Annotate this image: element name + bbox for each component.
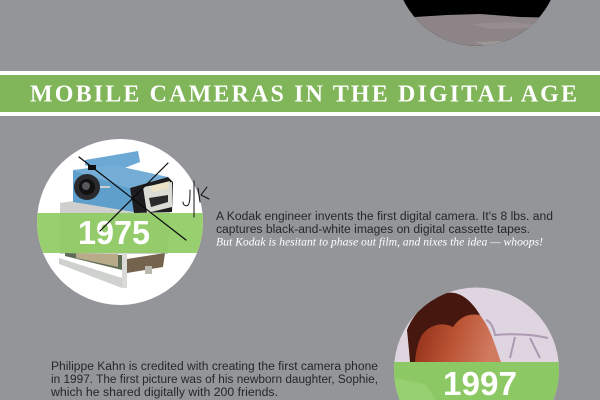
JK scribble <box>183 181 209 217</box>
section banner <box>0 71 600 116</box>
1975 circle with camera <box>30 139 210 305</box>
banner heading: MOBILE CAMERAS IN THE DIGITAL AGE <box>30 82 577 108</box>
italic aside: But Kodak is hesitant to phase out film, and nixes the idea — whoops! <box>216 235 543 249</box>
scribbled cross <box>79 157 186 240</box>
1997 description: Philippe Kahn is credited with creating the first camera phone <box>51 361 378 373</box>
1997 circle with baby photo <box>390 285 565 400</box>
green year band <box>30 213 210 253</box>
1975 description: captures black-and-white images on digital cassette tapes. <box>216 224 530 236</box>
baby photo <box>390 285 565 400</box>
year 1975: 1975 <box>78 214 150 251</box>
1997 description <box>50 361 378 399</box>
camera photo <box>59 151 173 288</box>
moon photo <box>403 0 551 46</box>
1997 description: in 1997. The first picture was of his newborn daughter, Sophie, <box>51 374 378 386</box>
1975 description <box>216 211 553 249</box>
1997 description: which he shared digitally with 200 friends. <box>50 387 278 399</box>
1975 description: A Kodak engineer invents the first digital camera. It's 8 lbs. and <box>216 211 553 223</box>
green year band <box>390 362 565 400</box>
